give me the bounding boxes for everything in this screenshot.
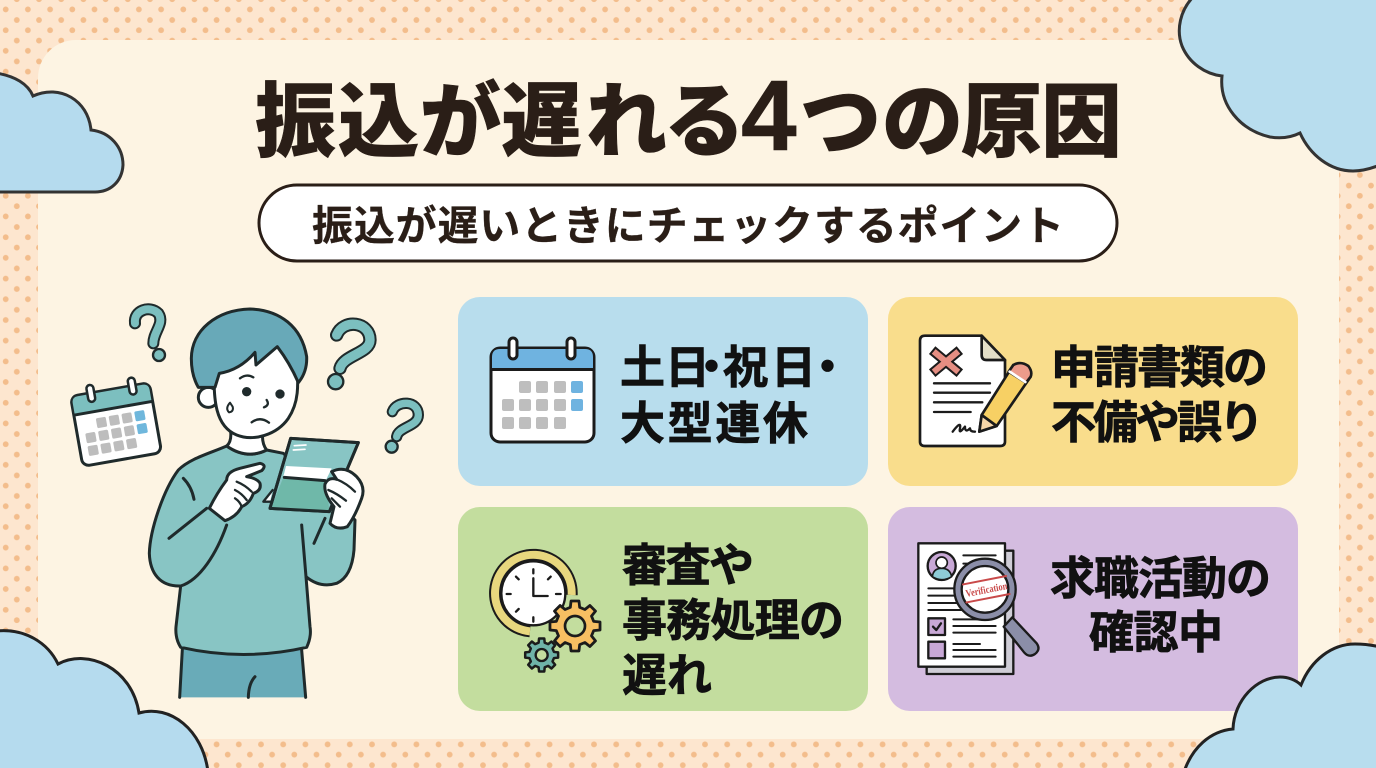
panel: processing delay (458, 507, 868, 711)
pointing hand (209, 463, 264, 521)
icon: question marks (135, 309, 418, 453)
icon: calendar (491, 338, 594, 442)
sweater (149, 446, 355, 654)
label: job search check: 確認中 (1089, 607, 1223, 658)
label: document errors: 申請書類の (1051, 342, 1268, 393)
panel: job search check (888, 507, 1298, 711)
illustration: worried person with passbook (149, 309, 363, 697)
icon: document and pencil (920, 336, 1031, 446)
holding hand (325, 469, 363, 528)
label: holidays: 大型連休 (620, 398, 808, 449)
gear: large (550, 601, 600, 651)
icon: small tilted calendar (69, 375, 162, 466)
ear (198, 387, 218, 407)
icon: documents and magnifier (918, 543, 1038, 674)
title: 振込が遅れる (255, 78, 745, 168)
cloud: top right (1179, 0, 1376, 171)
subtitle pill: 振込が遅いときにチェックするポイント (312, 203, 1064, 249)
label: job search check (1050, 553, 1271, 658)
stamp text: Verification (965, 581, 1008, 600)
panel: holidays (458, 297, 868, 486)
question mark left (135, 309, 165, 361)
label: holidays (620, 342, 850, 449)
label: holidays: 土日・祝日・ (620, 342, 850, 393)
cloud: bottom left (0, 631, 208, 768)
question mark middle (328, 324, 370, 389)
pants (179, 648, 306, 697)
panel: document errors (888, 297, 1298, 486)
label: processing delay: 遅れ (622, 650, 712, 701)
neck (227, 432, 267, 454)
title: 4 (741, 60, 797, 172)
icon: clock and gears (495, 555, 600, 671)
label: job search check: 求職活動の (1050, 553, 1271, 604)
gear: small (525, 639, 558, 671)
title: つの原因 (800, 78, 1122, 168)
question mark right (386, 403, 418, 453)
face (214, 330, 298, 438)
subtitle pill (259, 185, 1117, 261)
cloud: bottom right (1184, 644, 1376, 768)
sweater creases (169, 478, 325, 586)
cloud: top left (0, 73, 123, 192)
hair (191, 309, 307, 387)
eyes and mouth (227, 376, 285, 423)
label: document errors (1051, 342, 1268, 448)
label: processing delay: 審査や (622, 540, 754, 591)
label: document errors: 不備や誤り (1051, 397, 1264, 448)
label: processing delay (622, 540, 844, 701)
passbook (263, 438, 358, 512)
label: processing delay: 事務処理の (622, 595, 844, 646)
